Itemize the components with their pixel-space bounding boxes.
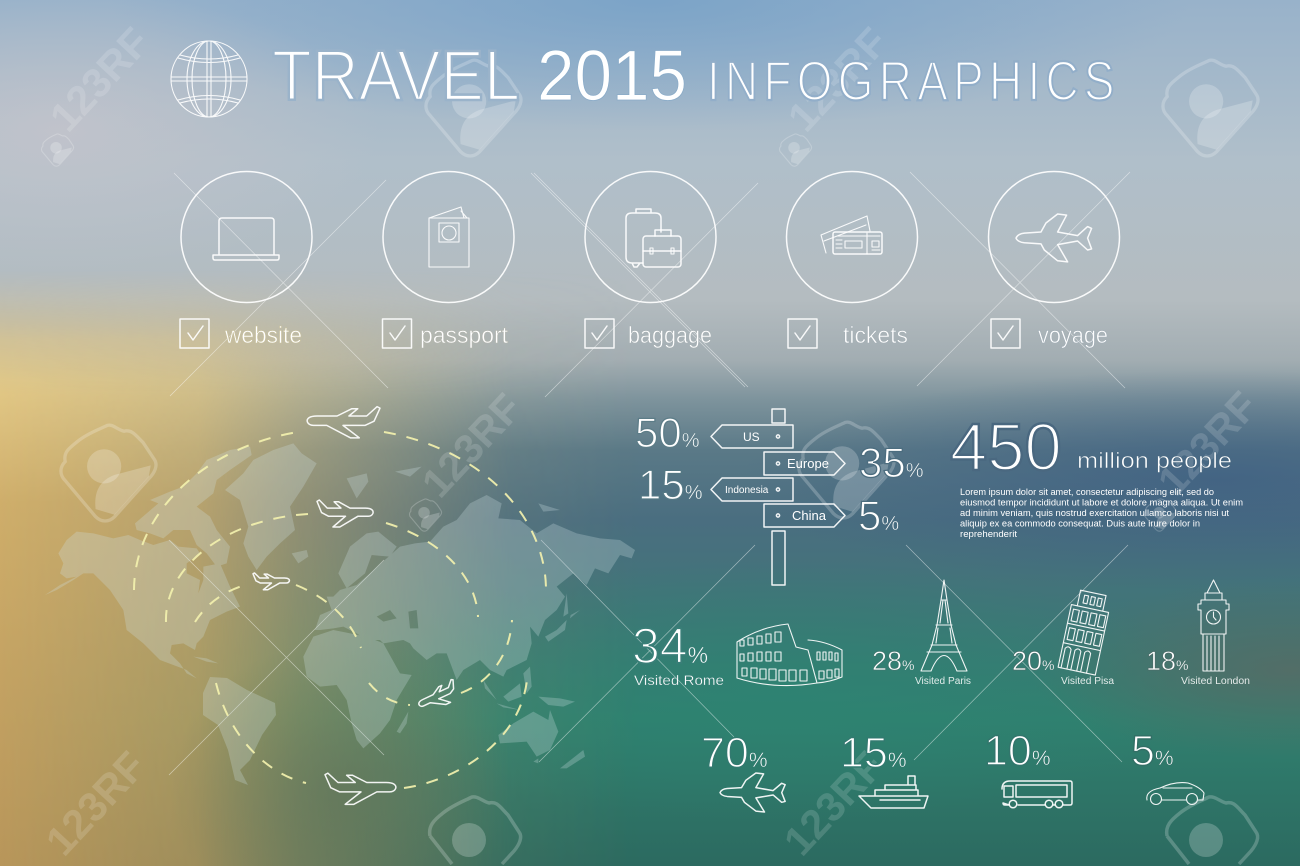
5% car: 5% <box>1131 727 1174 775</box>
15% ship <box>840 729 928 808</box>
item: passport <box>382 172 514 348</box>
watermarks: 123RF <box>779 19 897 140</box>
London stat: 18% <box>1146 646 1188 676</box>
icon: big ben <box>1198 580 1229 671</box>
watermarks: 123RF <box>1149 383 1267 504</box>
Svalbard and northern islands <box>347 467 560 512</box>
visited landmarks <box>632 580 1250 688</box>
icon: globe <box>171 41 247 117</box>
Paris stat: 28% <box>872 646 914 676</box>
item: voyage: voyage <box>1038 322 1108 348</box>
Rome stat: 34% <box>632 618 708 674</box>
item: voyage <box>988 172 1120 348</box>
destinations signpost: Europe <box>787 456 829 471</box>
Paris stat: Visited Paris <box>915 676 971 687</box>
title text: 2015: 2015 <box>537 37 687 116</box>
Eurasia <box>315 495 635 680</box>
watermarks: 123RF <box>37 743 155 864</box>
Caribbean islands <box>193 657 218 663</box>
Southeast Asia islands <box>483 667 575 710</box>
plane icons on routes <box>253 407 461 804</box>
5%: 5% <box>858 492 899 539</box>
lorem paragraph <box>960 487 1243 539</box>
icon: colosseum <box>737 624 842 686</box>
Pisa stat: 20% <box>1012 646 1054 676</box>
70% plane <box>701 729 785 812</box>
15% ship: 15% <box>840 729 907 777</box>
Arctic islands <box>135 447 252 567</box>
title <box>171 37 1115 117</box>
15%: 15% <box>638 461 703 508</box>
Scandinavia <box>338 532 397 588</box>
Australia <box>498 710 558 757</box>
Rome stat: Visited Rome <box>634 672 724 688</box>
flight routes <box>134 407 546 804</box>
signpost graphic <box>711 409 845 585</box>
sign labels: US <box>743 430 760 444</box>
Madagascar <box>397 712 408 733</box>
Tasmania and New Zealand <box>533 750 585 768</box>
item: baggage <box>585 172 716 348</box>
item: website <box>180 172 312 348</box>
Pisa stat <box>1012 646 1114 687</box>
panel: checklist <box>180 172 1120 348</box>
Greenland <box>225 443 317 570</box>
icon: eiffel tower <box>921 580 967 671</box>
destinations signpost <box>635 409 924 585</box>
lorem paragraph: reprehenderit <box>960 529 1018 539</box>
item: passport: passport <box>420 322 509 348</box>
London stat <box>1146 646 1250 687</box>
Old World <box>303 467 635 768</box>
Iceland <box>292 550 308 563</box>
dashed arcs <box>134 432 546 788</box>
Africa <box>303 630 412 748</box>
watermarks: 123RF <box>41 19 159 140</box>
lorem paragraph: Lorem ipsum dolor sit amet, consectetur adipiscing elit, sed do <box>960 487 1214 497</box>
item: website: website <box>224 322 302 348</box>
lorem paragraph: aliquip ex ea commodo consequat. Duis aute irure dolor in <box>960 518 1200 528</box>
title text: Travel: TRAVEL <box>272 37 520 116</box>
caption: million people <box>1077 448 1232 473</box>
North America <box>45 532 240 678</box>
10% bus <box>984 727 1072 808</box>
icon: leaning tower of pisa <box>1058 589 1112 675</box>
Rome stat <box>632 618 724 688</box>
450 million people <box>950 410 1243 539</box>
South America <box>203 677 276 785</box>
London stat: Visited London <box>1181 676 1250 687</box>
transport share <box>701 727 1204 812</box>
50%: 50% <box>635 409 700 456</box>
item: tickets <box>786 172 918 348</box>
lorem paragraph: ad minim veniam, quis nostrud exercitation ullamco laboris nisi ut <box>960 508 1230 518</box>
diagonal cross lines <box>169 172 1130 775</box>
10% bus: 10% <box>984 727 1051 775</box>
watermarks: 123RF <box>775 743 893 864</box>
watermarks: 123RF <box>413 385 531 506</box>
Pisa stat: Visited Pisa <box>1061 676 1114 687</box>
big number: 450 <box>950 410 1062 485</box>
world map <box>45 443 635 785</box>
destinations signpost: China <box>792 508 827 523</box>
35%: 35% <box>859 439 924 486</box>
Americas and Greenland <box>45 443 317 678</box>
destinations signpost: Indonesia <box>725 485 769 496</box>
title text: infographics: INFOGRAPHICS <box>707 50 1115 112</box>
Japan and Sakhalin <box>545 593 580 642</box>
item: tickets: tickets <box>843 322 908 348</box>
lorem paragraph: eiusmod tempor incididunt ut labore et dolore magna aliqua. Ut enim <box>960 498 1243 508</box>
5% car <box>1131 727 1204 804</box>
item: baggage: baggage <box>628 322 712 348</box>
70% plane: 70% <box>701 729 768 777</box>
Paris stat <box>872 646 971 687</box>
